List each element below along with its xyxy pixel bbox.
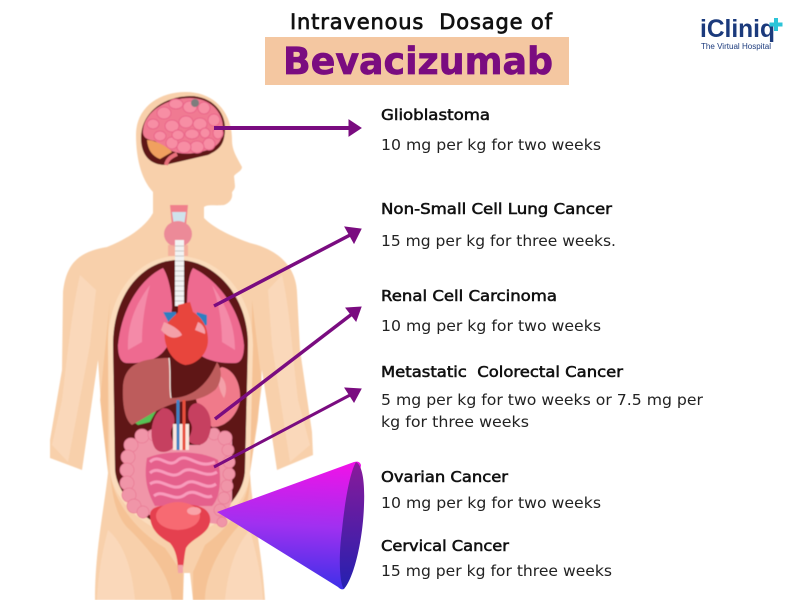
dose: cervical cancer: Cervical Cancer — [381, 537, 510, 555]
dose: glioblastoma — [381, 106, 601, 154]
dose: metastatic colorectal cancer: Metastatic Colorectal Cancer — [381, 363, 624, 381]
dose: ovarian cancer — [381, 468, 601, 512]
logo: iCliniq: The Virtual Hospital — [701, 42, 771, 51]
body cavity — [113, 260, 248, 533]
brain cavity — [141, 96, 225, 165]
lungs — [118, 268, 244, 363]
dose: glioblastoma: Glioblastoma — [381, 106, 490, 124]
liver — [123, 358, 221, 425]
heart — [161, 302, 208, 365]
dose: non-small cell lung cancer — [381, 200, 616, 250]
dose: renal cell carcinoma: Renal Cell Carcinoma — [381, 287, 557, 305]
limb highlights — [52, 275, 310, 600]
body silhouette — [50, 92, 313, 600]
dose: ovarian cancer: 10 mg per kg for two weeks — [381, 494, 601, 512]
dose: non-small cell lung cancer: Non-Small Cell Lung Cancer — [381, 200, 613, 218]
gallbladder — [131, 408, 158, 425]
dose: glioblastoma: 10 mg per kg for two weeks — [381, 136, 601, 154]
arrow: lungs to lung cancer — [214, 227, 361, 306]
human body illustration — [50, 92, 313, 600]
cone pointer — [217, 462, 364, 589]
dose: cervical cancer — [381, 537, 612, 580]
intestines — [120, 428, 235, 527]
dose: non-small cell lung cancer: 15 mg per kg for three weeks. — [381, 232, 616, 250]
dose: renal cell carcinoma: 10 mg per kg for two weeks — [381, 317, 601, 335]
thyroid and trachea — [164, 205, 192, 306]
arrow: brain to glioblastoma — [214, 120, 361, 136]
dose: renal cell carcinoma — [381, 287, 601, 335]
arrow: kidney to renal cell carcinoma — [215, 307, 361, 419]
dose: metastatic colorectal cancer: 5 mg per kg for two weeks or 7.5 mg per — [381, 391, 704, 409]
kidneys — [151, 400, 211, 452]
bladder — [150, 502, 210, 573]
body shading — [100, 300, 262, 600]
dose: metastatic colorectal cancer — [381, 363, 704, 431]
cavity rim — [108, 256, 253, 538]
stomach — [195, 367, 240, 427]
title: Intravenous Dosage of — [290, 10, 553, 34]
logo: iCliniq: iCliniq — [700, 15, 775, 43]
title highlight: Bevacizumab: Bevacizumab — [283, 40, 553, 83]
brain — [143, 98, 223, 165]
dose: metastatic colorectal cancer: kg for three weeks — [381, 413, 529, 431]
dose: cervical cancer: 15 mg per kg for three weeks — [381, 562, 612, 580]
dose: ovarian cancer: Ovarian Cancer — [381, 468, 509, 486]
arrow: intestine to colorectal cancer — [214, 388, 361, 467]
